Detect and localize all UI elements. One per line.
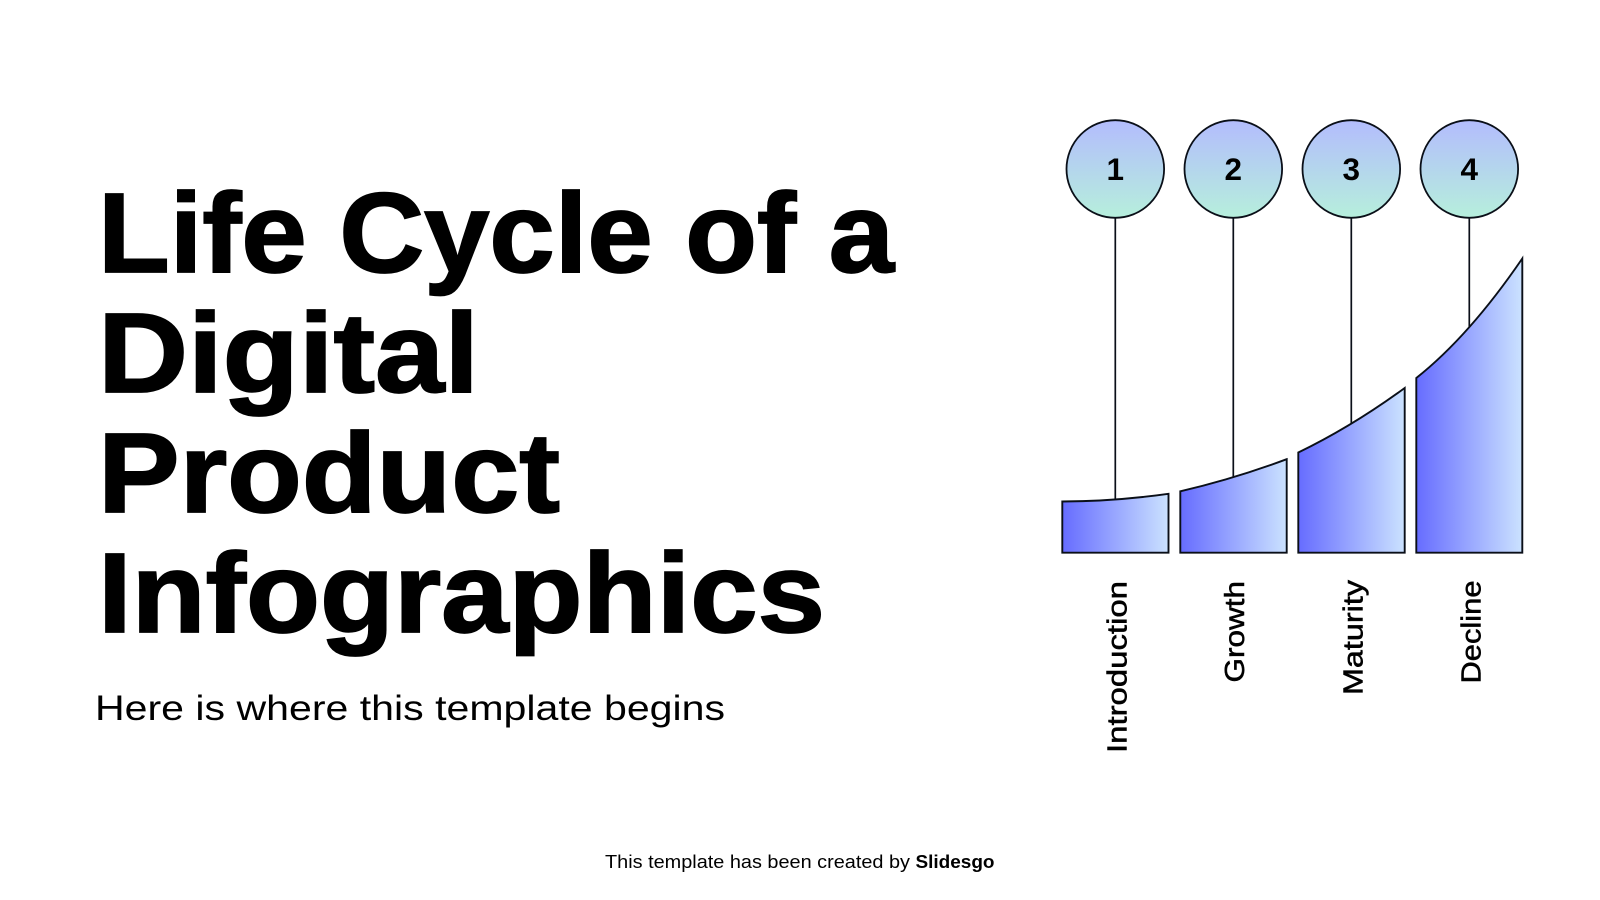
number circle 1: 1	[1107, 151, 1124, 187]
label 1: Introduction	[1102, 581, 1133, 753]
bar 3	[1298, 388, 1405, 553]
footer credit: This template has been created by	[605, 852, 910, 872]
connector 1	[1114, 217, 1116, 500]
subtitle: Here is where this template begins	[95, 689, 725, 728]
number circle 3	[1302, 120, 1400, 218]
label 2: Growth	[1219, 581, 1250, 682]
title: Digital	[98, 290, 479, 416]
number circle 2	[1184, 120, 1282, 218]
title: Infographics	[98, 530, 825, 656]
connector 4	[1468, 217, 1470, 328]
connector 2	[1232, 217, 1234, 478]
label 4: Decline	[1456, 580, 1487, 684]
stage 2: growth	[1180, 120, 1287, 682]
connector 3	[1350, 217, 1352, 424]
number circle 2: 2	[1225, 151, 1242, 187]
title	[98, 170, 895, 656]
bar 1	[1062, 494, 1168, 553]
number circle 1	[1066, 120, 1164, 218]
life cycle chart	[1062, 120, 1522, 753]
label 3: Maturity	[1338, 580, 1369, 695]
title: Product	[98, 410, 560, 536]
bar 2	[1180, 459, 1287, 553]
number circle 4: 4	[1461, 151, 1479, 187]
stage 4: decline	[1416, 120, 1522, 683]
bar 4	[1416, 258, 1522, 553]
title: Life Cycle of a	[98, 170, 895, 296]
footer credit: Slidesgo	[916, 852, 995, 872]
stage 3: maturity	[1298, 120, 1405, 695]
number circle 3: 3	[1343, 151, 1360, 187]
stage 1: introduction	[1062, 120, 1168, 753]
number circle 4	[1420, 120, 1518, 218]
